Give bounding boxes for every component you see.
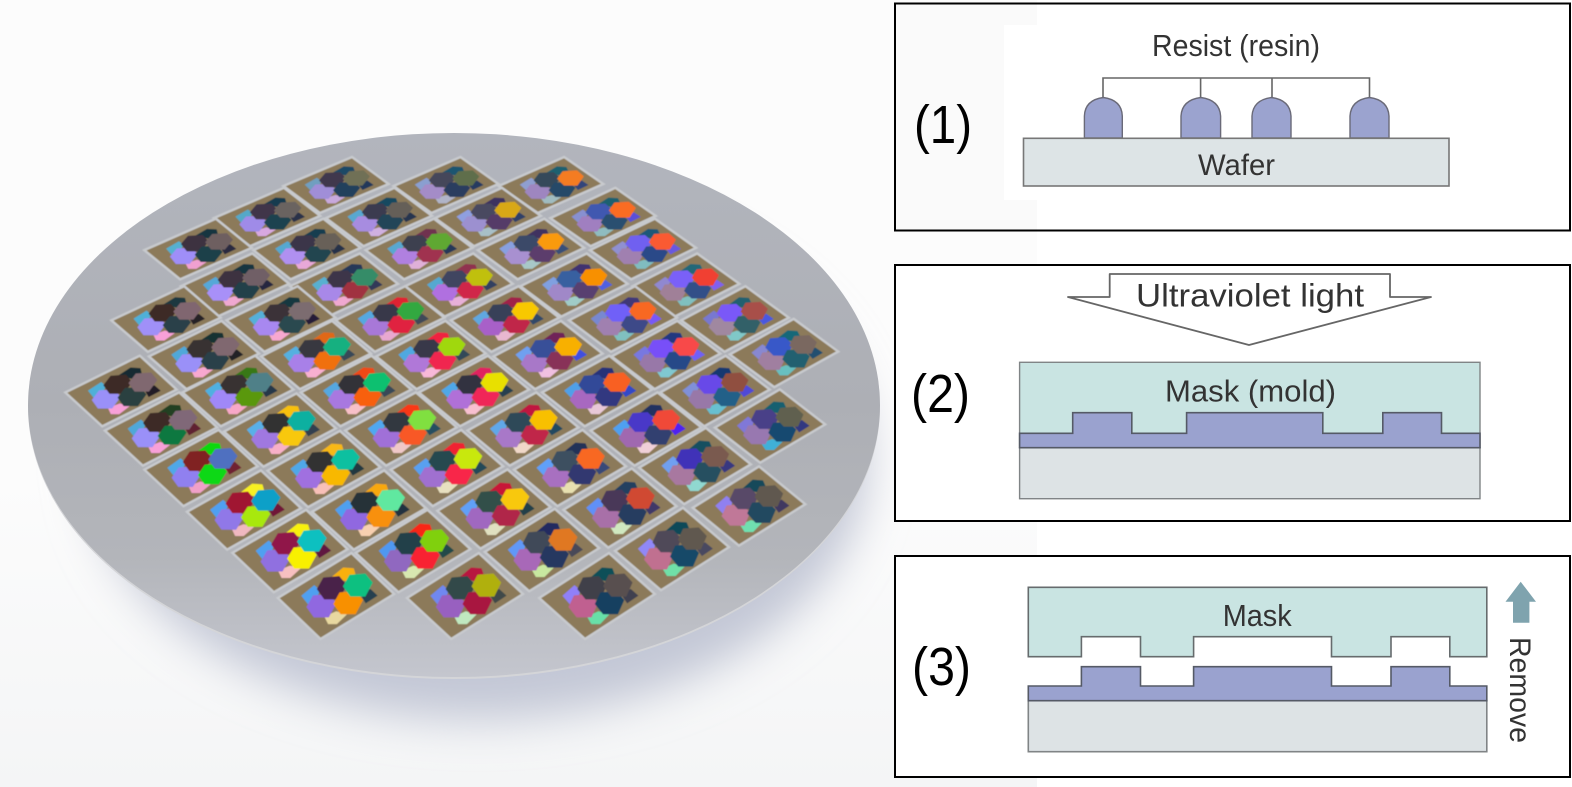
step number 3: (3) <box>912 637 971 697</box>
chip row 3 no 1 <box>144 219 252 279</box>
chip row 5 no 3 <box>336 286 444 352</box>
patterned resist <box>1028 667 1487 701</box>
chip row 5 no 1 <box>111 286 221 352</box>
chip row 5 no 4 <box>451 286 559 352</box>
chip row 2 no 1 <box>214 188 320 246</box>
chip array <box>65 157 838 639</box>
chip row 4 no 3 <box>405 253 513 317</box>
panel 3: mask removal <box>895 556 1570 777</box>
panel 3 frame <box>895 556 1570 777</box>
chip row 11 no 1 <box>232 510 348 592</box>
chip row 8 no 1 <box>105 392 217 466</box>
chip row 4 no 1 <box>181 253 289 317</box>
mask block <box>1020 362 1480 447</box>
chip row 3 no 2 <box>253 219 361 279</box>
ultraviolet label: Ultraviolet light <box>1136 278 1364 314</box>
chip row 6 no 5 <box>612 321 720 389</box>
chip row 10 no 2 <box>312 470 426 550</box>
resist leader lines <box>1103 78 1370 98</box>
chip row 6 no 4 <box>493 321 603 389</box>
chip row 3 no 5 <box>590 219 696 279</box>
chip row 7 no 3 <box>301 356 411 426</box>
chip row 8 no 3 <box>345 392 457 466</box>
chip row 5 no 6 <box>681 286 789 352</box>
chip row 10 no 1 <box>187 470 301 550</box>
chip row 7 no 6 <box>660 356 770 426</box>
photo background <box>0 0 1037 787</box>
panel 1: resist applied to wafer <box>895 4 1570 230</box>
resist label: Resist (resin) <box>1152 28 1320 63</box>
chip row 1 no 3 <box>499 157 603 213</box>
resist droplets <box>1084 98 1389 138</box>
remove arrow <box>1506 582 1536 623</box>
chip row 9 no 4 <box>514 430 626 506</box>
chip row 11 no 4 <box>615 508 729 590</box>
panel 1 off-white photo strip <box>896 4 1037 230</box>
mask label: Mask <box>1223 598 1292 633</box>
chip row 10 no 4 <box>563 468 677 548</box>
chip row 9 no 2 <box>268 431 380 507</box>
wafer drop shadow <box>88 196 868 720</box>
chip row 12 no 3 <box>539 553 655 639</box>
chip row 3 no 4 <box>478 219 584 279</box>
wafer block <box>1024 138 1449 186</box>
chip row 2 no 2 <box>326 188 432 246</box>
chip row 10 no 5 <box>693 466 805 546</box>
chip row 8 no 6 <box>715 389 825 463</box>
wafer rim <box>28 135 880 679</box>
chip row 7 no 5 <box>542 356 652 426</box>
panel 2: ultraviolet exposure through mask <box>895 265 1570 521</box>
chip row 6 no 1 <box>149 321 259 389</box>
chip row 9 no 3 <box>391 430 503 506</box>
panel 1 frame <box>895 4 1570 230</box>
chip row 5 no 5 <box>569 286 677 352</box>
chip row 2 no 3 <box>435 188 541 246</box>
chip row 11 no 3 <box>485 509 599 591</box>
chip row 12 no 1 <box>278 553 394 639</box>
chip row 4 no 5 <box>633 253 739 317</box>
chip row 6 no 2 <box>261 321 371 389</box>
chip row 6 no 6 <box>730 319 838 387</box>
chip row 9 no 1 <box>144 430 258 506</box>
wafer surface <box>28 133 880 677</box>
mask label: Mask (mold) <box>1165 374 1336 409</box>
wafer block <box>1028 701 1487 752</box>
chip row 1 no 2 <box>394 157 498 213</box>
panel 2 frame <box>895 265 1570 521</box>
chip row 9 no 5 <box>639 428 751 504</box>
chip row 12 no 2 <box>407 553 523 639</box>
chip row 4 no 4 <box>520 253 628 317</box>
chip row 7 no 1 <box>65 356 177 426</box>
step number 2: (2) <box>911 364 970 424</box>
chip row 6 no 3 <box>376 321 486 389</box>
ultraviolet light arrow <box>1068 274 1431 345</box>
cured resist layer <box>1020 413 1480 448</box>
chip row 8 no 4 <box>467 392 579 466</box>
chip row 3 no 3 <box>366 219 472 279</box>
remove label: Remove <box>1503 637 1536 743</box>
chip row 10 no 3 <box>437 469 551 549</box>
chip row 2 no 4 <box>550 188 656 246</box>
step number 1: (1) <box>914 95 972 155</box>
silicon wafer with imprinted chips <box>28 133 880 720</box>
wafer label: Wafer <box>1198 149 1275 182</box>
chip row 7 no 2 <box>182 356 294 426</box>
chip row 11 no 2 <box>356 510 470 592</box>
lifted mask <box>1028 587 1487 657</box>
wafer block <box>1020 448 1480 499</box>
chip row 8 no 2 <box>224 393 336 467</box>
chip row 8 no 5 <box>591 392 701 466</box>
chip row 4 no 2 <box>290 253 398 317</box>
chip row 1 no 1 <box>283 157 389 213</box>
chip row 7 no 4 <box>419 356 529 426</box>
chip row 5 no 2 <box>226 286 336 352</box>
